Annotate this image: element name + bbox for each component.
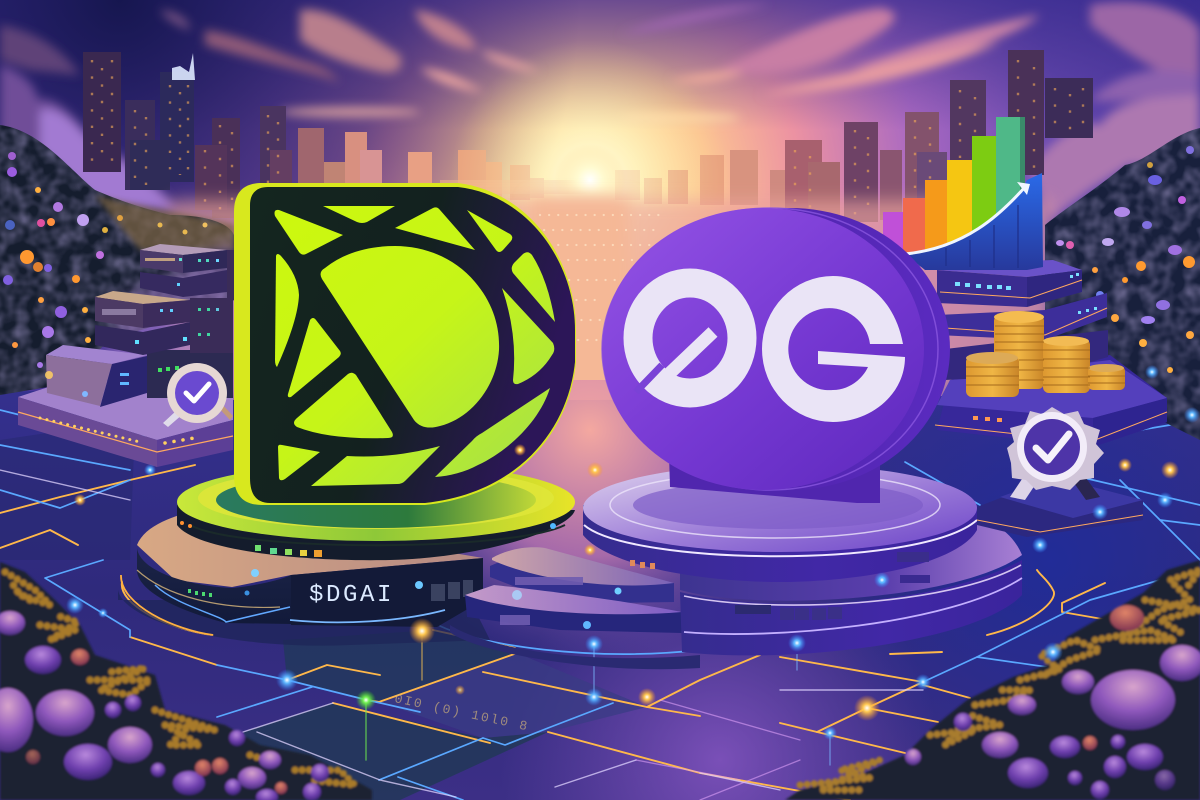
green platform upper tier [177, 463, 575, 560]
glowing nodes [66, 365, 1200, 740]
foliage: right hillside [1040, 120, 1200, 440]
server units [147, 350, 233, 398]
letter 0 [636, 283, 742, 393]
circuit traces [0, 372, 1200, 800]
tower highlight [172, 53, 195, 80]
hazy distant plain [170, 198, 1050, 400]
foliage: bottom-right [785, 560, 1200, 800]
badge: right gear check [1007, 407, 1104, 500]
steps between platforms [450, 547, 700, 669]
sun glow [450, 40, 730, 320]
$DGAI label: $DGAI [309, 582, 394, 609]
foliage: bottom-left [0, 562, 372, 800]
purple platform lower tier [680, 515, 1022, 655]
base tier [18, 380, 233, 440]
facets [323, 206, 395, 223]
server stack right [913, 260, 1167, 447]
DGAI logo [234, 183, 576, 505]
badge: left check [163, 363, 233, 427]
city windows [92, 60, 1083, 215]
bar chart [883, 117, 1043, 270]
circuit panels on floor [0, 420, 647, 800]
binary glyphs on floor: 0I0 (0) 10l0 8 [393, 691, 531, 734]
city skyline [83, 50, 1093, 222]
green platform lower tier [118, 510, 490, 646]
light beams [594, 643, 830, 765]
badge pedestal [977, 477, 1143, 537]
letter G [762, 276, 905, 422]
server stack left [18, 244, 235, 467]
sky background [0, 0, 1200, 440]
0G logo [602, 208, 950, 503]
purple platform upper tier [583, 464, 977, 584]
clouds [0, 2, 1200, 220]
circuit floor [0, 380, 1200, 800]
foliage: left hillside [0, 120, 240, 400]
coin stacks [966, 311, 1125, 397]
